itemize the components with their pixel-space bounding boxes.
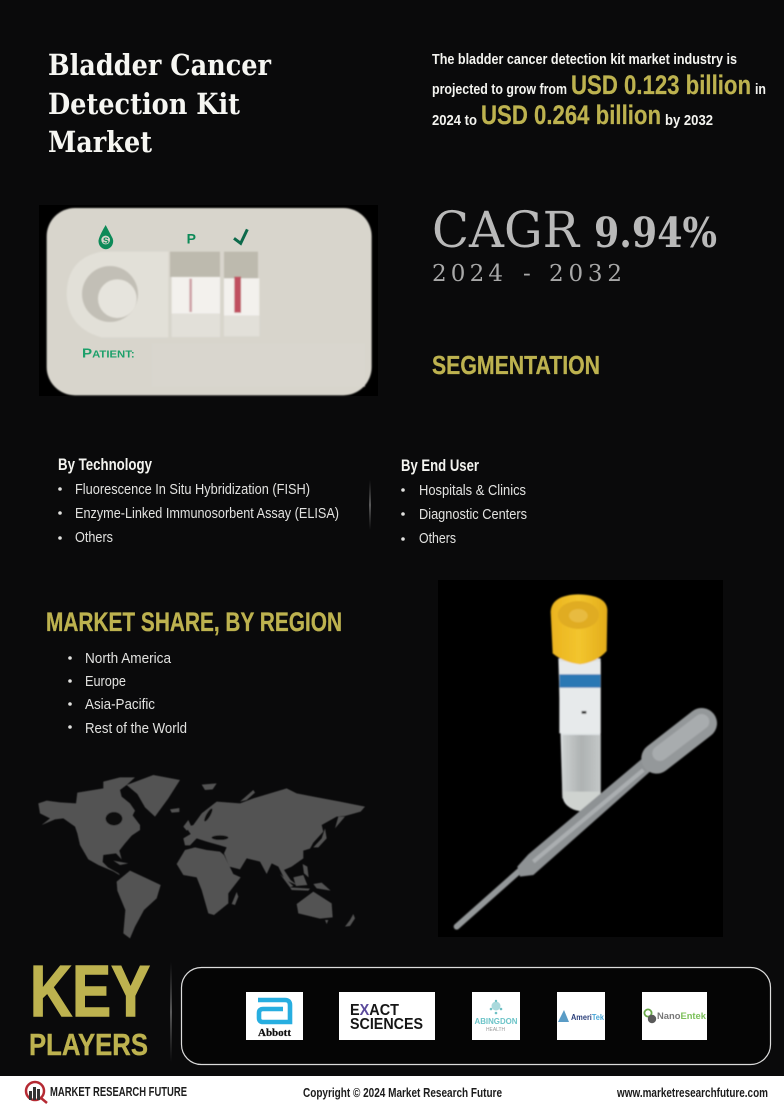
world map	[38, 775, 365, 938]
logo: Exact Sciences: SCIENCES	[350, 1016, 423, 1033]
heading: key players: PLAYERS	[29, 1027, 148, 1062]
photo: bladder cancer test cassette: PATIENT:	[82, 346, 135, 361]
footer logo icon	[26, 1082, 47, 1103]
heading: market share by region: MARKET SHARE, BY REGION	[46, 607, 342, 637]
CAGR figure: CAGR	[432, 201, 580, 259]
region list: Europe	[85, 673, 126, 690]
logo: Abbott: Abbott	[258, 1027, 291, 1039]
title: Detection Kit	[48, 87, 241, 121]
region list: Rest of the World	[85, 720, 187, 737]
segment list: by technology: Others	[75, 529, 113, 546]
segment list: by technology: By Technology	[58, 455, 152, 474]
segment list: by technology	[58, 455, 339, 546]
market projection text: USD 0.123 billion	[571, 70, 751, 100]
region list: Asia-Pacific	[85, 696, 155, 713]
market projection text	[432, 51, 766, 130]
photo: bladder cancer test cassette: P	[187, 230, 196, 246]
CAGR period	[432, 261, 622, 287]
footer	[0, 1076, 784, 1108]
footer: Copyright © 2024 Market Research Future	[303, 1085, 502, 1100]
region list	[68, 650, 187, 737]
market projection text: USD 0.264 billion	[481, 100, 661, 130]
heading: key players	[29, 952, 150, 1062]
logo: Exact Sciences: EXACT	[350, 1002, 399, 1019]
logo: NanoEntek	[642, 992, 707, 1040]
logo: Abingdon Health	[472, 992, 520, 1040]
CAGR period: -	[523, 261, 531, 287]
logo: Abingdon Health: HEALTH	[486, 1027, 505, 1033]
segment list: by end user: Diagnostic Centers	[419, 506, 527, 523]
CAGR period: 2032	[549, 261, 622, 287]
segment list: by end user: Hospitals & Clinics	[419, 482, 526, 499]
photo: bladder cancer test cassette	[39, 205, 378, 396]
photo: sample tube and pipette	[438, 580, 723, 937]
logo: AmeriTek	[557, 992, 605, 1040]
segment list: by technology: Fluorescence In Situ Hybridization (FISH)	[75, 481, 310, 498]
CAGR figure: 9.94%	[594, 209, 717, 257]
region list: North America	[85, 650, 172, 667]
segment list: by end user: Others	[419, 530, 456, 547]
logo: NanoEntek: NanoEntek	[657, 1011, 707, 1022]
market projection text: in	[755, 81, 766, 98]
key players panel	[182, 968, 770, 1064]
footer: MARKET RESEARCH FUTURE	[50, 1084, 187, 1099]
title	[48, 48, 272, 159]
market projection text: projected to grow from	[432, 81, 567, 98]
title: Bladder Cancer	[48, 48, 272, 82]
logo: Abbott	[246, 992, 303, 1040]
logo: Abingdon Health: ABINGDON	[474, 1017, 518, 1026]
heading: key players: KEY	[30, 952, 150, 1032]
segment list: by end user	[401, 456, 527, 547]
title: Market	[48, 125, 153, 159]
segment list: by end user: By End User	[401, 456, 479, 475]
logo: Exact Sciences	[339, 992, 435, 1040]
logo: AmeriTek: AmeriTek	[571, 1013, 604, 1022]
market projection text: by 2032	[665, 112, 713, 129]
market projection text: 2024 to	[432, 112, 477, 129]
CAGR figure	[432, 201, 717, 259]
CAGR period: 2024	[432, 261, 503, 287]
segment list: by technology: Enzyme-Linked Immunosorbent Assay (ELISA)	[75, 505, 339, 522]
photo: bladder cancer test cassette: S	[103, 235, 109, 245]
heading: segmentation: SEGMENTATION	[432, 350, 600, 380]
